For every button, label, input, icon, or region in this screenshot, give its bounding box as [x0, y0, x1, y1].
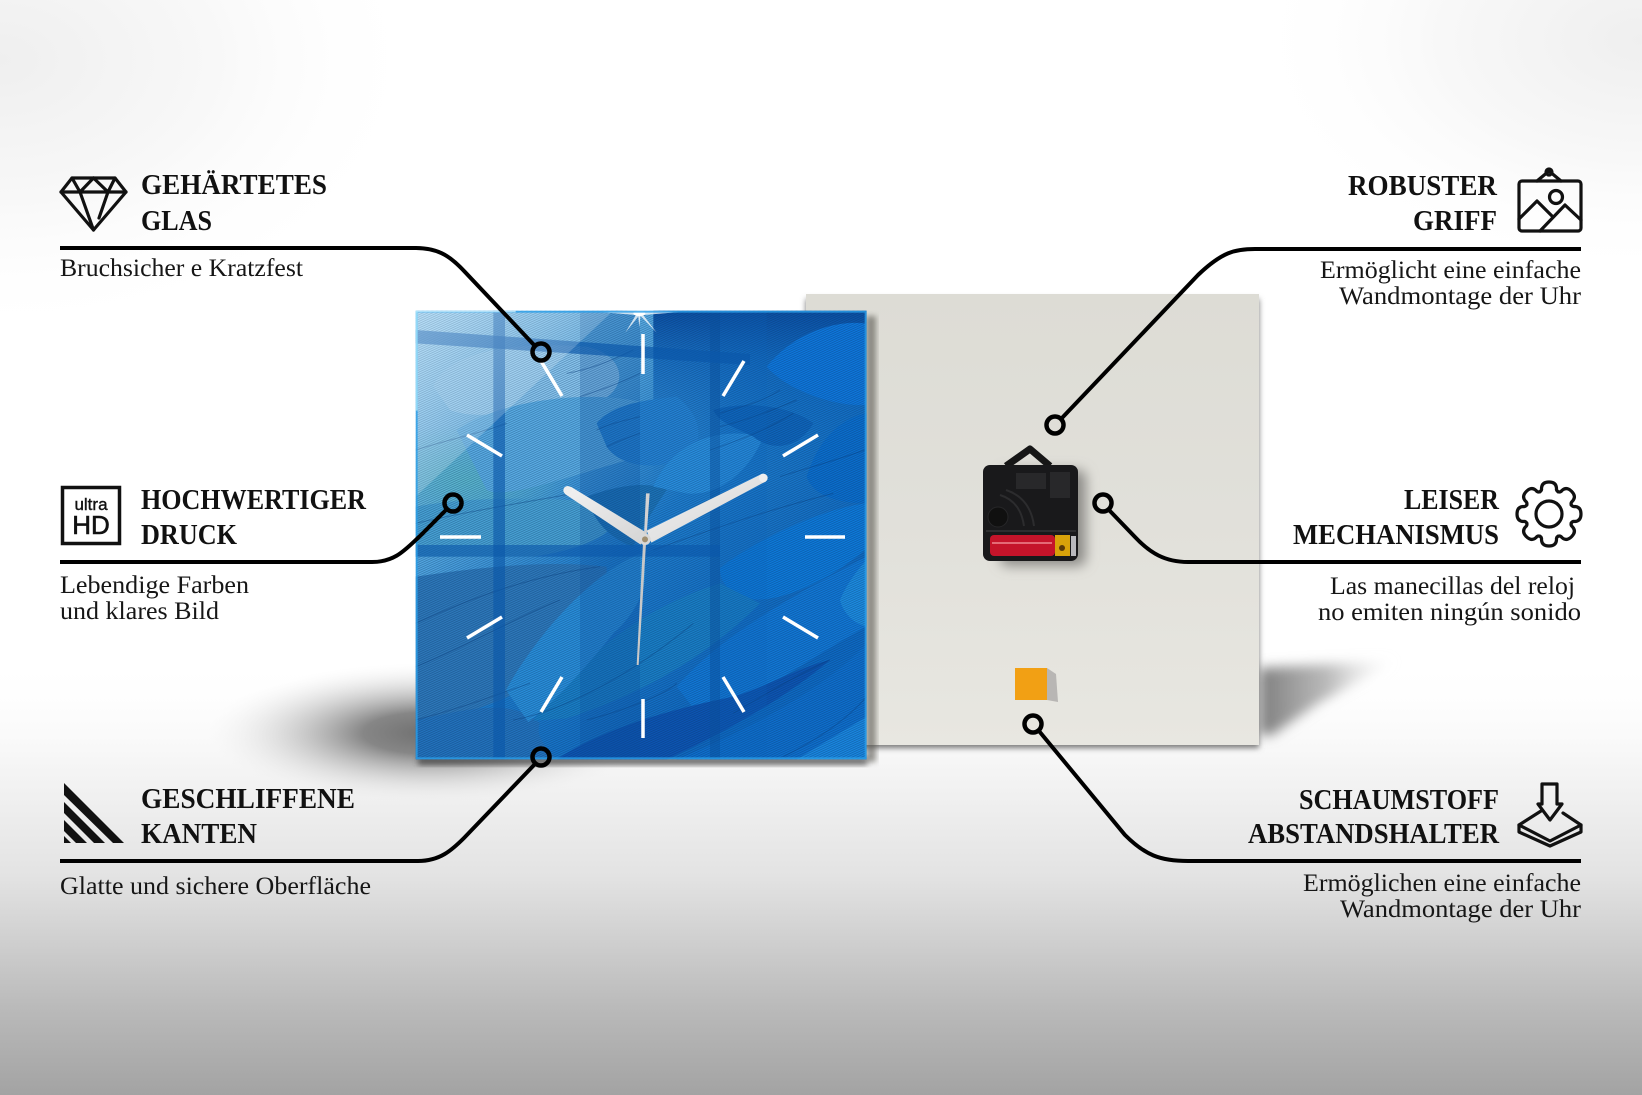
connector line — [60, 248, 535, 346]
connector dot — [1024, 716, 1042, 732]
description: Ermöglicht eine einfache — [1320, 257, 1581, 284]
heading: ROBUSTER — [1348, 171, 1498, 202]
heading: GESCHLIFFENE — [141, 784, 355, 815]
connector dot — [444, 494, 462, 512]
icon: polished edge — [64, 783, 124, 843]
connector line — [60, 509, 447, 562]
panel: glass clock front — [416, 310, 867, 760]
icon: ultra HD: ultra — [74, 495, 108, 514]
callout: Robuster Griff — [1046, 169, 1582, 434]
description: Lebendige Farben — [60, 572, 250, 599]
icon: ultra HD — [62, 488, 120, 544]
heading: GRIFF — [1413, 206, 1497, 237]
description: Las manecillas del reloj — [1330, 573, 1575, 600]
heading: LEISER — [1404, 485, 1500, 516]
callout: Hochwertiger Druck — [60, 485, 462, 625]
description: Wandmontage der Uhr — [1340, 896, 1582, 923]
heading: KANTEN — [141, 819, 257, 850]
icon: hanging picture — [1519, 169, 1581, 231]
icon: diamond — [61, 178, 126, 230]
heading: GEHÄRTETES — [141, 170, 327, 201]
icon: ultra HD: HD — [72, 510, 110, 540]
foam spacer — [1015, 668, 1058, 702]
connector dot — [1094, 494, 1112, 512]
heading: GLAS — [141, 206, 212, 237]
right floor shadow of the back panel — [1259, 660, 1398, 735]
connector dot — [1046, 416, 1064, 434]
panel: clock back side — [806, 294, 1259, 748]
callout: Schaumstoff Abstandshalter — [1024, 716, 1582, 923]
heading: ABSTANDSHALTER — [1248, 819, 1500, 850]
heading: SCHAUMSTOFF — [1299, 785, 1499, 816]
description: Wandmontage der Uhr — [1339, 283, 1582, 310]
connector line — [1109, 510, 1581, 562]
connector dot — [532, 344, 550, 360]
description: Bruchsicher e Kratzfest — [60, 255, 303, 282]
heading: DRUCK — [141, 520, 237, 551]
connector line — [60, 764, 535, 861]
callout: Leiser Mechanismus — [1094, 482, 1581, 626]
icon: foam pad with arrow — [1519, 784, 1581, 846]
clock artwork: blue feathers — [416, 310, 867, 760]
description: no emiten ningún sonido — [1318, 599, 1581, 626]
connector line — [1061, 249, 1581, 419]
connector line — [1039, 731, 1581, 861]
icon: gear — [1517, 482, 1581, 546]
heading: MECHANISMUS — [1293, 520, 1499, 551]
connector dot — [532, 748, 550, 766]
bottom shadow of clock — [418, 757, 867, 765]
clock hands — [563, 474, 768, 665]
callout: Geschliffene Kanten — [60, 748, 550, 900]
heading: HOCHWERTIGER — [141, 485, 367, 516]
clock shadow on panel — [866, 316, 876, 762]
description: Ermöglichen eine einfache — [1303, 870, 1581, 897]
left floor shadow of the clock — [208, 663, 652, 803]
clock movement — [983, 449, 1086, 566]
description: und klares Bild — [60, 598, 220, 625]
hour markers — [440, 334, 845, 738]
description: Glatte und sichere Oberfläche — [60, 873, 371, 900]
decorative glare — [600, 310, 680, 333]
callout: Gehärtetes Glas — [60, 170, 550, 360]
